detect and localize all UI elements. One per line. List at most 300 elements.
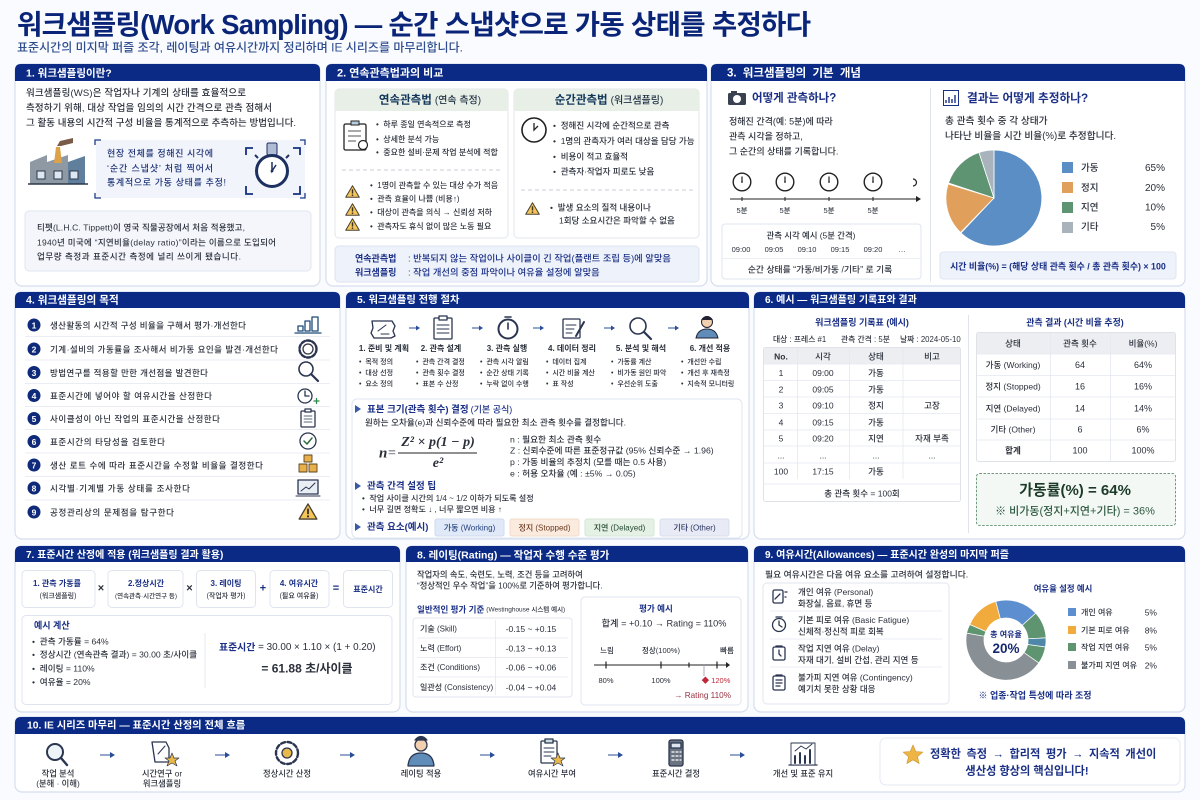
list: purposes 1 to 9: 생산 로트 수에 따라 표준시간을 수정할 비율을 결정한다 (50, 461, 263, 471)
table: Westinghouse criteria: -0.13 ~ +0.13 (506, 644, 557, 654)
chips: observation elements: 기타 (Other) (673, 524, 716, 533)
formula definitions: n : 필요한 최소 관측 횟수 (510, 434, 601, 445)
heading: panel 6: 6. 예시 — 워크샘플링 기록표와 결과 (765, 293, 917, 306)
text: rating description (417, 570, 603, 591)
table: Westinghouse criteria: -0.04 ~ +0.04 (506, 683, 557, 693)
formula: Z² × p(1 − p) (400, 435, 475, 450)
step titles: 2. 관측 설계 (421, 343, 461, 353)
table: results: 가동 (Working) (986, 360, 1041, 370)
callout: instant snapshot: 통계적으로 가동 상태를 추정! (107, 177, 226, 188)
callout: instant snapshot (95, 140, 305, 198)
subtitle: 표준시간의 미지막 퍼즐 조각, 레이팅과 여유시간까지 정리하며 IE 시리즈를 마무리합니다. (17, 40, 463, 55)
table: record sheet: 정지 (868, 401, 884, 411)
legend: allowance: 불가피 지연 여유 (1081, 660, 1137, 670)
definition text: 워크샘플링(WS)은 작업자나 기계의 상태를 효율적으로 (26, 87, 246, 99)
step bullet lists: • 대상 선정 (359, 368, 393, 377)
step bullet lists: • 목적 정의 (359, 357, 393, 366)
card: continuous observation (335, 89, 508, 238)
subheading: evaluation criteria: 일반적인 평가 기준 (Westinghouse 시스템 예시) (417, 604, 565, 615)
panel: 7 standard time (15, 546, 400, 712)
list: advantages: • 하루 종일 연속적으로 측정 (376, 119, 471, 129)
table: record sheet: 날짜 : 2024-05-10 (900, 334, 961, 344)
list: advantages: • 비용이 적고 효율적 (553, 152, 628, 162)
formula box: 시간 비율(%) = (해당 상태 관측 횟수 / 총 관측 횟수) × 100 (950, 261, 1166, 272)
list: purposes 1 to 9: 생산활동의 시간적 구성 비율을 구해서 평가·개선한다 (50, 321, 246, 331)
timeline: clocks at 5-minute intervals: 5분 (823, 206, 835, 215)
table: record sheet: 4 (779, 418, 784, 428)
box: example calculation: • 여유율 = 20% (32, 676, 91, 687)
chart: rating scale: 정상(100%) (642, 645, 680, 655)
table: results: 14 (1075, 404, 1085, 414)
list: purposes 1 to 9: 3 (32, 368, 37, 378)
flow step labels: 레이팅 적용 (401, 769, 442, 779)
legend: status ratio: 정지 (1081, 182, 1098, 194)
step bullet lists: • 시간 비율 계산 (546, 368, 595, 377)
table: results: 64% (1134, 360, 1152, 370)
summary box: : 반복되지 않는 작업이나 사이클이 긴 작업(플랜트 조립 등)에 알맞음 (408, 253, 671, 264)
flow step labels: (분해 · 이해) (36, 779, 80, 789)
table: record sheet (764, 317, 961, 502)
table: Westinghouse criteria: 노력 (Effort) (420, 644, 462, 653)
definition text: 측정하기 위해, 대상 작업을 임의의 시간 간격으로 관측 점해서 (26, 102, 272, 114)
summary box: 연속관측법 (355, 253, 396, 264)
step bullet lists: • 지속적 모니터링 (681, 379, 734, 388)
table: record sheet: 가동 (868, 467, 884, 477)
table: results: 100% (1131, 446, 1155, 456)
text: how to observe: 정해진 간격(예: 5분)에 따라 (729, 116, 834, 127)
icon: star (903, 745, 923, 764)
timeline: clocks at 5-minute intervals: 5분 (736, 206, 748, 215)
table: Westinghouse criteria (413, 618, 572, 697)
icon: clipboard timer (344, 121, 368, 150)
icon: stopwatch (246, 143, 300, 194)
table: Westinghouse criteria: 조건 (Conditions) (420, 662, 480, 672)
panel: 1 what is work sampling (15, 64, 320, 286)
icon: small chart (944, 90, 958, 106)
chips: observation elements: 지연 (Delayed) (594, 524, 646, 533)
list: interval tips: • 너무 길면 정확도 ↓ , 너무 짧으면 비용 ↑ (362, 504, 502, 514)
flow step labels: 작업 분석 (42, 769, 74, 779)
formula box: 원하는 오차율(e)과 신뢰수준에 따라 필요한 최소 관측 횟수를 결정합니다. (365, 418, 626, 428)
table: record sheet: 비고 (924, 352, 940, 362)
table: record sheet: 09:15 (812, 418, 834, 428)
flow: standard time formula: 4. 여유시간 (280, 578, 319, 588)
chart: rating scale: → Rating 110% (674, 691, 731, 700)
table: record sheet: ... (872, 451, 880, 461)
definition text: 그 활동 내용의 시간적 구성 비율을 통계적으로 추측하는 방법입니다. (26, 117, 296, 129)
formula definitions: e : 허용 오차율 (예 : ±5% → 0.05) (510, 468, 636, 479)
flow step labels: 여유시간 부여 (528, 769, 576, 779)
list: disadvantages: • 관측 효율이 나쁨 (비용↑) (370, 194, 460, 204)
table: record sheet: 1 (779, 368, 784, 378)
table: record sheet: 가동 (868, 368, 884, 378)
panel: 5 procedure (346, 292, 749, 539)
legend: status ratio (1062, 162, 1165, 233)
subheading: how to estimate: 결과는 어떻게 추정하나? (967, 91, 1088, 105)
list: allowance factors: 기본 피로 여유 (Basic Fatigue) (798, 615, 909, 625)
table: example observation times: 09:00 (732, 245, 750, 254)
panel: 9 allowances (754, 546, 1185, 712)
flow step labels (36, 769, 833, 789)
table: record sheet: 시각 (815, 352, 831, 362)
list: purposes 1 to 9: 6 (32, 437, 37, 447)
result: standard time: 표준시간 = 30.00 × 1.10 × (1 + 0.20) (219, 641, 376, 653)
list: disadvantages: • 관측자도 휴식 없이 많은 노동 필요 (370, 221, 491, 231)
callout: instant snapshot: ‘순간 스냅샷’ 처럼 찍어서 (107, 163, 213, 174)
chips: observation elements (435, 519, 729, 536)
callout: key message (880, 738, 1180, 785)
step bullet lists: • 관측 간격 결정 (416, 357, 465, 366)
table: record sheet: 17:15 (812, 467, 834, 477)
list: purposes 1 to 9: 사이클성이 아닌 작업의 표준시간을 산정한다 (50, 414, 220, 424)
table: Westinghouse criteria: -0.15 ~ +0.15 (506, 624, 557, 634)
panel: 10 wrap-up flow (15, 717, 1185, 792)
list: purposes 1 to 9 (28, 318, 278, 518)
text: rating description: “정상적인 우수 작업”을 100%로 기준하여 평가합니다. (417, 581, 603, 591)
callout: key message: 생산성 향상의 핵심입니다! (965, 764, 1089, 778)
icon: warnings (346, 186, 359, 230)
list: disadvantages (550, 203, 675, 226)
box: example calculation: • 레이팅 = 110% (32, 664, 95, 674)
legend: allowance: 기본 피로 여유 (1081, 625, 1130, 635)
text: how to estimate (945, 114, 1116, 142)
list: purposes 1 to 9: 1 (32, 321, 37, 331)
step titles: 6. 개선 적용 (690, 343, 731, 353)
arrows: flow (100, 752, 745, 758)
list: purposes 1 to 9: 표준시간의 타당성을 검토한다 (50, 437, 165, 447)
text: how to estimate: 나타난 비율을 시간 비율(%)로 추정합니다. (945, 129, 1116, 142)
panel: 4 purposes (15, 292, 340, 539)
table: record sheet: 5 (779, 434, 784, 444)
flow: standard time formula: 3. 레이팅 (211, 578, 241, 588)
callout: operating rate result: ※ 비가동(정지+지연+기타) = 36% (995, 505, 1155, 518)
subheading: interval tip: 관측 간격 설정 팁 (367, 480, 436, 492)
icons: steps (371, 316, 651, 339)
table: example observation times: 순간 상태를 “가동/비가동 /기타” 로 기록 (748, 264, 892, 275)
table: record sheet: 2 (779, 385, 784, 395)
step bullet lists (359, 357, 734, 388)
table: record sheet: ... (928, 451, 936, 461)
table: results: 관측 결과 (시간 비율 추정) (1026, 317, 1124, 328)
callout: key message: 정확한 측정 → 합리적 평가 → 지속적 개선이 (930, 747, 1156, 761)
list: allowance factors: 불가피 지연 여유 (Contingency) (798, 673, 913, 683)
list: purposes 1 to 9: 공정관리상의 문제점을 탐구한다 (50, 508, 174, 518)
chart: rating scale (594, 645, 734, 700)
table: record sheet: 대상 : 프레스 #1 (773, 334, 826, 344)
table: results: 합계 (1005, 446, 1021, 456)
flow: standard time formula: 표준시간 (353, 584, 383, 594)
subheading: allowance setting example: 여유율 설정 예시 (1034, 584, 1092, 594)
panel: 6 example record (754, 292, 1185, 539)
legend: status ratio: 65% (1145, 163, 1165, 174)
flow: standard time formula: × (98, 583, 104, 595)
flow step labels: 표준시간 결정 (652, 769, 700, 779)
donut chart: allowance (966, 600, 1046, 680)
list: allowance factors: 자재 대기, 설비 간섭, 관리 지연 등 (798, 655, 919, 665)
legend: status ratio: 기타 (1081, 222, 1099, 233)
table: record sheet: No. (774, 352, 788, 362)
table: Westinghouse criteria: 일관성 (Consistency) (420, 682, 494, 692)
list: interval tips (362, 493, 534, 514)
table: record sheet: 100 (774, 467, 788, 477)
table: record sheet: ... (777, 451, 785, 461)
callout: operating rate result: 가동률(%) = 64% (1019, 482, 1131, 499)
result: standard time (219, 641, 376, 676)
chart: rating scale: 80% (598, 676, 614, 685)
step bullet lists: • 가동률 계산 (611, 357, 652, 366)
list: purposes 1 to 9: 4 (32, 391, 37, 401)
step bullet lists: • 개선안 수립 (681, 357, 722, 366)
table: Westinghouse criteria: -0.06 ~ +0.06 (506, 663, 557, 673)
list: interval tips: • 작업 사이클 시간의 1/4 ~ 1/2 이하가 되도록 설정 (362, 493, 534, 503)
step bullet lists: • 비가동 원인 파악 (611, 368, 667, 377)
chart: rating scale: 빠름 (720, 645, 734, 655)
flow: standard time formula: 1. 관측 가동률 (33, 578, 82, 588)
box: example calculation: • 관측 가동률 = 64% (32, 637, 109, 647)
table: record sheet: 가동 (868, 385, 884, 395)
list: disadvantages (370, 180, 498, 231)
table: record sheet: 워크샘플링 기록표 (예시) (815, 317, 909, 328)
heading: panel 3: 3. 워크샘플링의 기본 개념 (727, 66, 861, 80)
note: history: 1940년 미국에 “지연비율(delay ratio)”이라는 이름으로 도입되어 (37, 238, 276, 248)
step titles (359, 343, 731, 353)
list: purposes 1 to 9: 9 (32, 508, 37, 518)
flow step labels: 워크샘플링 (143, 779, 181, 789)
list: allowance factors: 개인 여유 (Personal) (798, 587, 873, 597)
donut centre label (990, 629, 1022, 656)
list: advantages: • 중요한 설비·문제 작업 분석에 적합 (376, 147, 498, 157)
list: advantages (553, 121, 695, 177)
icon: worker (696, 316, 718, 338)
chart: rating scale: ◆ 120% (702, 676, 731, 685)
list: allowance factors: 화장실, 음료, 휴면 등 (798, 599, 873, 609)
summary box: 워크샘플링 (355, 267, 396, 278)
step bullet lists: • 관측 시각 알림 (480, 357, 529, 366)
icon: warning (526, 203, 539, 214)
table: record sheet: 09:10 (812, 401, 834, 411)
chips: observation elements: 가동 (Working) (444, 524, 496, 533)
flow: standard time formula: (필요 여유율) (280, 591, 318, 600)
table: example observation times: 09:20 (864, 245, 882, 254)
table: example observation times: 09:10 (798, 245, 816, 254)
formula (379, 435, 477, 471)
table: Westinghouse criteria: 기술 (Skill) (420, 624, 457, 634)
heading: panel 8: 8. 레이팅(Rating) — 작업자 수행 수준 평가 (417, 549, 610, 562)
list: disadvantages: 1회당 소요시간은 파악할 수 없음 (559, 216, 675, 226)
panel: 2 comparison (326, 64, 707, 286)
table: results: 비율(%) (1129, 339, 1158, 349)
legend: status ratio: 20% (1145, 183, 1165, 194)
list: purposes 1 to 9: 시각별·기계별 가동 상태를 조사한다 (50, 484, 190, 494)
list: advantages: • 상세한 분석 가능 (376, 134, 439, 144)
table: results (976, 317, 1176, 462)
note: history (25, 211, 311, 271)
icons: allowance factors (772, 590, 787, 690)
table: record sheet: 지연 (868, 434, 884, 444)
icon: warning (299, 504, 317, 519)
box: example calculation (22, 616, 392, 704)
text: rating description: 작업자의 속도, 숙련도, 노력, 조건 등을 고려하여 (417, 570, 583, 580)
summary box: : 작업 개선의 중점 파악이나 여유율 설정에 알맞음 (408, 267, 600, 278)
text: how to observe: 그 순간의 상태를 기록합니다. (729, 146, 838, 157)
chart: rating scale: 느림 (600, 645, 614, 655)
arrows: steps (409, 326, 679, 330)
flow: standard time formula: 2.정상시간 (128, 578, 165, 588)
timeline: clocks at 5-minute intervals (730, 173, 921, 215)
list: purposes 1 to 9: 5 (32, 414, 37, 424)
donut centre label: 총 여유율 (990, 629, 1022, 639)
step bullet lists: • 순간 상태 기록 (480, 368, 529, 377)
legend: allowance: 5% (1145, 608, 1157, 618)
box: example calculation: 예시 계산 (34, 620, 70, 631)
step bullet lists: • 우선순위 도출 (611, 379, 658, 388)
step bullet lists: • 데이터 집계 (546, 357, 586, 366)
list: disadvantages: • 1명이 관측할 수 있는 대상 수가 적음 (370, 180, 498, 190)
icons: flow steps (47, 736, 817, 766)
formula definitions: Z : 신뢰수준에 따른 표준정규값 (95% 신뢰수준 → 1.96) (510, 445, 714, 456)
step bullet lists: • 표 작성 (546, 379, 574, 388)
panel: 8 rating (406, 546, 748, 712)
table: results: 기타 (Other) (991, 425, 1036, 435)
step bullet lists: • 관측 횟수 결정 (416, 368, 465, 377)
step titles: 3. 관측 실행 (487, 343, 527, 353)
step titles: 5. 분석 및 해석 (616, 343, 666, 353)
table: record sheet: 상태 (868, 352, 884, 362)
table: results: 상태 (1005, 339, 1021, 349)
legend: status ratio: 10% (1145, 203, 1165, 214)
list: allowance factors: 신체적·정신적 피로 회복 (798, 627, 884, 637)
box: example calculation: • 정상시간 (연속관측 결과) = 30.00 초/사이클 (32, 649, 197, 660)
legend: status ratio: 5% (1151, 222, 1165, 233)
text: how to observe: 관측 시각을 정하고, (729, 131, 803, 142)
callout: operating rate result (976, 474, 1176, 526)
formula box (940, 252, 1176, 279)
list: allowance factors: 예기치 못한 상황 대응 (798, 684, 876, 694)
step bullet lists: • 개선 후 재측정 (681, 368, 730, 377)
table: example observation times: … (898, 245, 906, 254)
heading: panel 4: 4. 워크샘플링의 목적 (26, 294, 119, 307)
card: instantaneous observation (514, 89, 699, 238)
table: record sheet: 총 관측 횟수 = 100회 (824, 489, 900, 499)
table: record sheet: ... (819, 451, 827, 461)
card: instantaneous observation: 순간관측법 (워크샘플링) (555, 93, 663, 107)
list: allowance factors: 작업 지연 여유 (Delay) (798, 644, 880, 654)
table: example observation times: 09:15 (831, 245, 849, 254)
flow: standard time formula: (작업자 평가) (207, 591, 245, 600)
list: advantages: • 1명의 관측자가 여러 대상을 담당 가능 (553, 136, 695, 146)
legend: allowance: 작업 지연 여유 (1081, 642, 1130, 652)
table: results: 정지 (Stopped) (985, 382, 1041, 392)
flow: standard time formula: (연속관측·시간연구 등) (115, 591, 177, 600)
list: purposes 1 to 9: 기계·설비의 가동률을 조사해서 비가동 요인을 발견·개선한다 (50, 345, 278, 355)
table: results: 64 (1075, 360, 1085, 370)
icon: factory (28, 138, 88, 184)
subheading: observation elements: 관측 요소(예시) (367, 521, 428, 533)
box: rating example: 합계 = +0.10 → Rating = 110% (602, 618, 726, 629)
table: results: 지연 (Delayed) (986, 404, 1041, 414)
table: record sheet: 자재 부족 (915, 434, 949, 444)
card: continuous observation: 연속관측법 (연속 측정) (379, 93, 481, 107)
step bullet lists: • 누락 없이 수행 (480, 379, 529, 388)
formula: = (388, 446, 396, 461)
flow step labels: 정상시간 산정 (263, 769, 311, 779)
heading: panel 5: 5. 워크샘플링 전행 절차 (357, 293, 460, 306)
title: 워크샘플링(Work Sampling) — 순간 스냅샷으로 가동 상태를 추정하다 (17, 9, 811, 40)
table: record sheet: 09:00 (812, 368, 834, 378)
heading: panel 1: 1. 워크샘플링이란? (26, 67, 112, 80)
flow: standard time formula: = (333, 583, 339, 595)
definition text (26, 87, 296, 129)
flow step labels: 개선 및 표준 유지 (773, 769, 833, 779)
list: disadvantages: • 발생 요소의 질적 내용이나 (550, 203, 651, 213)
pie chart: status ratio (946, 150, 1042, 246)
box: rating example (581, 597, 741, 705)
subheading: how to observe: 어떻게 관측하나? (752, 91, 836, 105)
list: disadvantages: • 대상이 관측을 의식 → 신뢰성 저하 (370, 207, 493, 217)
legend: status ratio: 가동 (1081, 163, 1099, 174)
list: purposes 1 to 9: 2 (32, 345, 37, 355)
list: advantages (376, 119, 498, 157)
heading: panel 9: 9. 여유시간(Allowances) — 표준시간 완성의 마지막 퍼즐 (765, 548, 1009, 561)
timeline: clocks at 5-minute intervals: 5분 (867, 206, 879, 215)
icons: purposes (295, 317, 321, 496)
subheading: sample size: 표본 크기(관측 횟수) 결정(기본 공식) (367, 403, 512, 415)
table: record sheet: 09:05 (812, 385, 834, 395)
chips: observation elements: 정지 (Stopped) (518, 523, 571, 533)
formula box (352, 399, 742, 538)
table: results: 100 (1072, 446, 1088, 456)
flow: standard time formula: + (260, 583, 266, 595)
legend: allowance: 2% (1145, 661, 1157, 671)
chart: rating scale: 100% (651, 676, 671, 685)
step titles: 4. 데이터 정리 (548, 343, 596, 353)
flow: standard time formula: × (186, 583, 193, 595)
table: results: 16% (1134, 382, 1152, 392)
list: purposes 1 to 9: 8 (32, 484, 37, 494)
legend: allowance: 5% (1145, 643, 1157, 653)
table: example observation times (722, 224, 921, 279)
table: results: 16 (1075, 382, 1085, 392)
table: record sheet: 관측 간격 : 5분 (841, 334, 890, 344)
heading: panel 2: 2. 연속관측법과의 비교 (337, 66, 443, 80)
step bullet lists: • 표본 수 산정 (416, 379, 458, 388)
table: record sheet: 가동 (868, 418, 884, 428)
table: record sheet: 3 (779, 401, 784, 411)
flow step labels: 시간연구 or (142, 769, 182, 779)
table: results: 14% (1134, 404, 1152, 414)
text: allowance intro: 필요 여유시간은 다음 여유 요소를 고려하여 설정합니다. (765, 569, 968, 580)
legend: allowance: 개인 여유 (1081, 607, 1113, 617)
formula: e² (433, 456, 444, 471)
heading: panel 7: 7. 표준시간 산정에 적용 (워크샘플링 결과 활용) (26, 548, 223, 561)
table: results: 관측 횟수 (1063, 339, 1097, 349)
note: history: 업무량 측정과 표준시간 측정에 널리 쓰이게 됐습니다. (37, 252, 241, 262)
formula: n (379, 446, 387, 462)
table: record sheet: 고장 (924, 401, 940, 411)
formula definitions (510, 434, 714, 479)
list: advantages: • 관측자·작업자 피로도 낮음 (553, 167, 654, 177)
callout: instant snapshot: 현장 전체를 정해진 시각에 (107, 148, 213, 159)
list: purposes 1 to 9: 방법연구를 적용할 만한 개선점을 발견한다 (50, 368, 208, 378)
result: standard time: = 61.88 초/사이클 (261, 662, 353, 676)
heading: panel 10: 10. IE 시리즈 마무리 — 표준시간 산정의 전체 흐름 (27, 719, 246, 732)
flow: standard time formula (22, 570, 392, 608)
list: allowance factors (763, 583, 949, 704)
table: example observation times: 09:05 (765, 245, 783, 254)
legend: status ratio: 지연 (1081, 202, 1098, 214)
legend: allowance (1068, 607, 1157, 671)
summary box (335, 246, 699, 282)
